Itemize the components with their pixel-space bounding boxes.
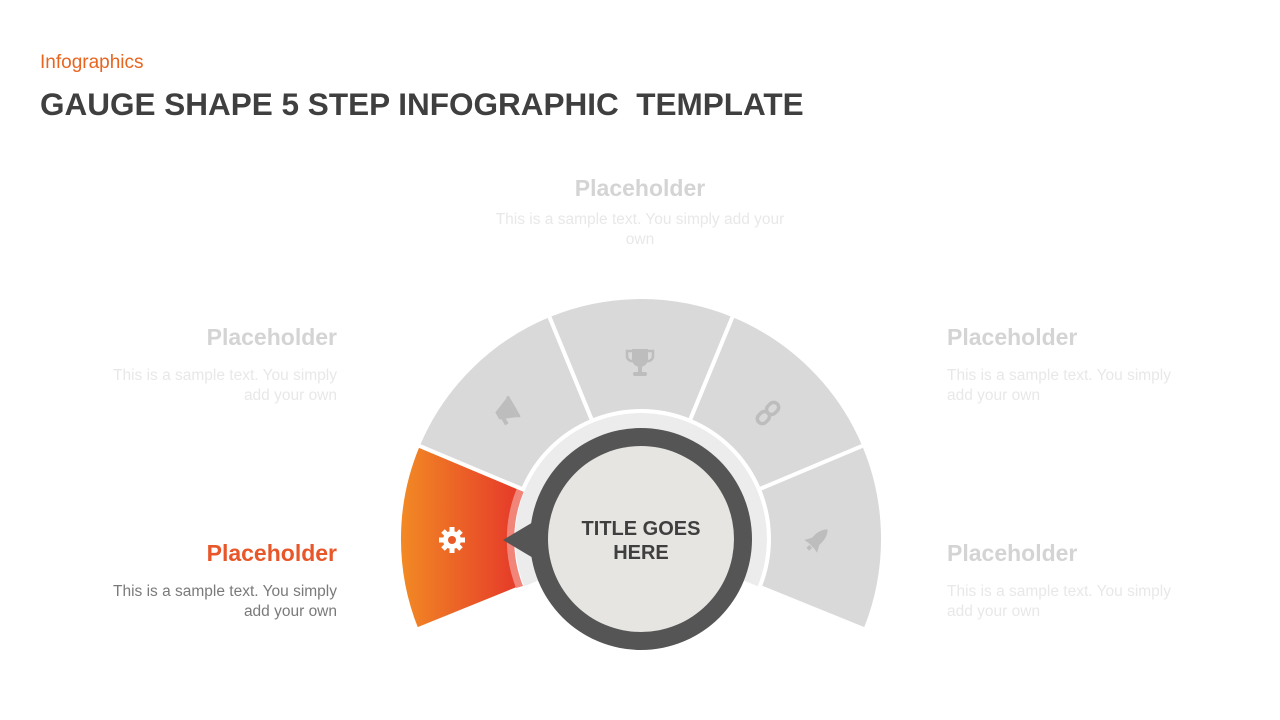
text block: right upper: This is a sample text. You simply add your own xyxy=(947,367,1171,404)
text block: right upper xyxy=(947,324,1171,404)
text block: left upper xyxy=(113,324,337,404)
title: GAUGE SHAPE 5 STEP INFOGRAPHIC TEMPLATE xyxy=(40,86,804,122)
center: pointer and dial: HERE xyxy=(613,542,669,564)
text block: top: This is a sample text. You simply add your own xyxy=(496,211,784,248)
text block: left upper: This is a sample text. You simply add your own xyxy=(113,367,337,404)
segment 3 xyxy=(549,297,733,421)
text block: left lower (active): Placeholder xyxy=(207,540,337,566)
text block: right lower: This is a sample text. You simply add your own xyxy=(947,583,1171,620)
light ring xyxy=(515,413,767,586)
text block: left lower (active) xyxy=(113,540,337,620)
segment 1 orange xyxy=(399,445,524,630)
icon: trophy xyxy=(627,349,653,376)
center: pointer and dial xyxy=(503,428,752,650)
segment 4 xyxy=(690,315,864,489)
text block: right lower xyxy=(947,540,1171,620)
icon: rocket xyxy=(801,523,834,556)
text block: right upper: Placeholder xyxy=(947,324,1077,350)
text block: right lower: Placeholder xyxy=(947,540,1077,566)
subtitle: Infographics xyxy=(40,52,144,73)
center: pointer and dial: TITLE GOES xyxy=(582,518,700,540)
icon: megaphone xyxy=(491,396,521,426)
segment 2 xyxy=(418,315,592,489)
text block: top xyxy=(496,175,784,248)
segment 5 xyxy=(759,445,883,630)
text block: left upper: Placeholder xyxy=(207,324,337,350)
icon: link xyxy=(755,400,781,426)
text block: top: Placeholder xyxy=(575,175,705,201)
icon: gear xyxy=(439,527,465,553)
text block: left lower (active): This is a sample text. You simply add your own xyxy=(113,583,337,620)
